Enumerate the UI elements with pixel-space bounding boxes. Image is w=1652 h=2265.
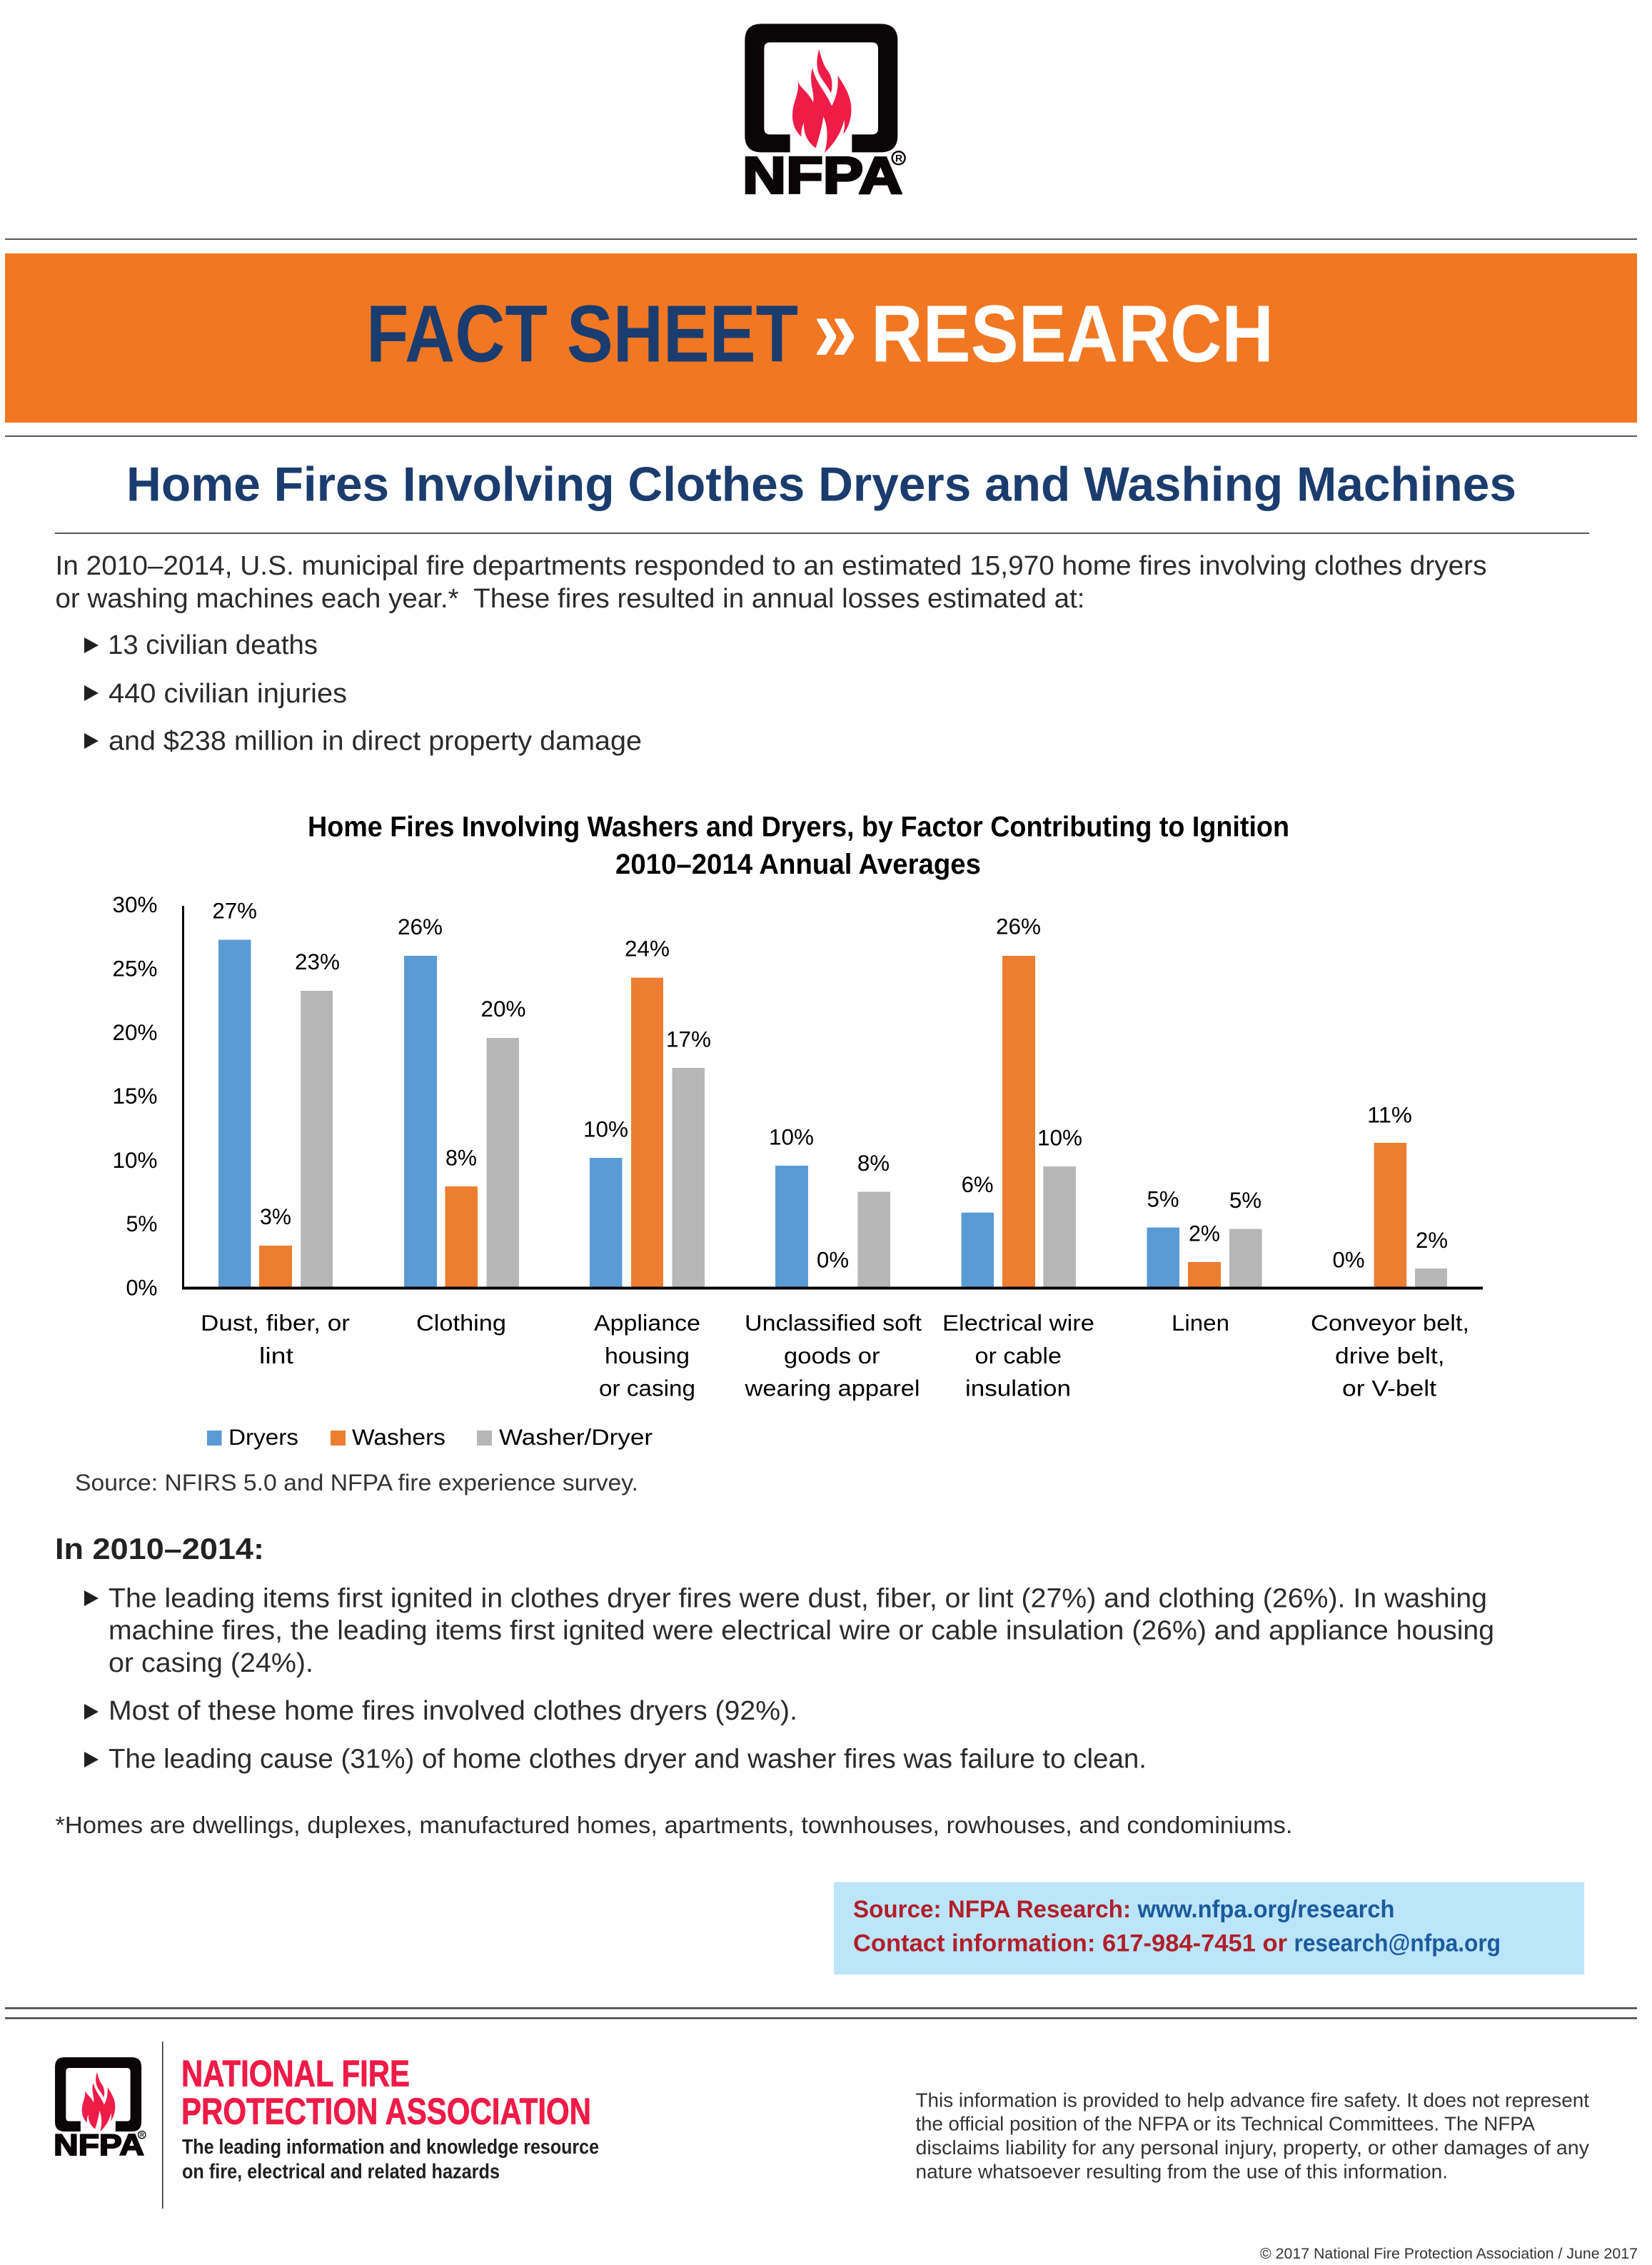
footer: organization name and tagline: on fire, electrical and related hazards: [182, 2160, 500, 2183]
intro paragraph: In 2010–2014, U.S. municipal fire departments responded to an estimated 15,970 home fires involving clothes dryers: [56, 551, 1486, 581]
category labels: or V-belt: [1342, 1375, 1436, 1401]
legend: Washer/Dryer: [499, 1424, 653, 1450]
logo: NFPA footer: R: [140, 2132, 144, 2139]
logo: NFPA top: R: [895, 153, 902, 164]
disclaimer: nature whatsoever resulting from the use of this information.: [915, 2160, 1448, 2183]
bullet list: findings: or casing (24%).: [109, 1648, 313, 1678]
data labels: 6%: [962, 1171, 994, 1197]
y axis labels: 30%: [113, 892, 157, 917]
title: Home Fires Involving Clothes Dryers and Washing Machines: [126, 457, 1516, 511]
category labels: or cable: [975, 1343, 1062, 1368]
axes: [182, 906, 1483, 1289]
logo: NFPA top: NFPA: [742, 147, 902, 205]
logo: NFPA top: [742, 24, 905, 205]
bars: washers: [259, 956, 1406, 1288]
chart title: [308, 811, 1289, 880]
category labels: Appliance: [594, 1310, 700, 1336]
data labels: 10%: [1037, 1125, 1082, 1151]
bullet list: findings: machine fires, the leading items first ignited were electrical wire or cable insulation (26%) and appliance housing: [109, 1616, 1494, 1646]
data labels: 24%: [625, 935, 670, 961]
data labels: 26%: [996, 914, 1041, 939]
banner: fact sheet research: FACT SHEET: [366, 288, 798, 378]
intro paragraph: [56, 551, 1486, 614]
disclaimer: disclaims liability for any personal injury, property, or other damages of any: [915, 2137, 1589, 2159]
bullet list: annual losses: and $238 million in direct property damage: [109, 727, 642, 757]
callout: source and contact: [834, 1882, 1584, 1974]
y axis labels: 20%: [113, 1019, 157, 1045]
callout: source and contact: Contact information: 617-984-7451 or: [853, 1930, 1287, 1957]
intro paragraph: or washing machines each year.* These fires resulted in annual losses estimated at:: [56, 584, 1085, 614]
callout: source and contact: research@nfpa.org: [1294, 1930, 1501, 1957]
chart source: Source: NFIRS 5.0 and NFPA fire experience survey.: [75, 1470, 638, 1495]
callout: source and contact: Source: NFPA Research:: [853, 1896, 1131, 1923]
category labels: Dust, fiber, or: [201, 1310, 350, 1336]
y axis labels: [113, 892, 157, 1301]
data labels: 23%: [295, 949, 340, 974]
y axis labels: 25%: [113, 955, 157, 981]
chart title: 2010–2014 Annual Averages: [615, 849, 981, 880]
data labels: 10%: [583, 1116, 628, 1142]
category labels: Conveyor belt,: [1311, 1310, 1469, 1336]
logo: NFPA footer: NFPA: [54, 2128, 144, 2161]
data labels: [212, 898, 1448, 1272]
y axis labels: 0%: [126, 1275, 157, 1301]
bullet list: annual losses: 13 civilian deaths: [108, 630, 318, 660]
banner: fact sheet research: [5, 253, 1637, 423]
callout: source and contact: www.nfpa.org/research: [1137, 1896, 1395, 1923]
category labels: Linen: [1172, 1310, 1229, 1336]
y axis labels: 10%: [113, 1147, 157, 1173]
y axis labels: 15%: [113, 1083, 157, 1109]
y axis labels: 5%: [126, 1211, 157, 1236]
data labels: 26%: [398, 914, 443, 939]
footer: organization name and tagline: NATIONAL FIRE: [181, 2053, 410, 2094]
data labels: 3%: [260, 1204, 291, 1229]
heading: in 2010-2014: In 2010–2014:: [55, 1532, 264, 1565]
data labels: 5%: [1229, 1187, 1261, 1213]
data labels: 20%: [481, 996, 525, 1021]
legend: Dryers: [228, 1424, 298, 1450]
banner: fact sheet research: RESEARCH: [871, 288, 1274, 378]
banner: fact sheet research: »: [813, 277, 857, 381]
data labels: 27%: [212, 898, 257, 924]
category labels: insulation: [965, 1375, 1071, 1401]
data labels: 8%: [445, 1145, 477, 1171]
category labels: lint: [259, 1343, 293, 1368]
data labels: 8%: [857, 1150, 890, 1176]
bullet list: findings: The leading cause (31%) of home clothes dryer and washer fires was failure to clean.: [109, 1745, 1147, 1775]
bullet list: findings: [84, 1583, 1494, 1775]
bar chart: [113, 892, 1483, 1450]
bullet list: findings: Most of these home fires involved clothes dryers (92%).: [109, 1696, 797, 1726]
data labels: 17%: [666, 1026, 711, 1052]
disclaimer: [915, 2089, 1589, 2183]
data labels: 11%: [1367, 1102, 1412, 1128]
data labels: 0%: [817, 1246, 849, 1272]
copyright: © 2017 National Fire Protection Association / June 2017: [1260, 2245, 1638, 2262]
category labels: drive belt,: [1335, 1343, 1445, 1368]
bars: washer/dryer: [301, 991, 1447, 1288]
footnote: *Homes are dwellings, duplexes, manufactured homes, apartments, townhouses, rowhouses, and condominiums.: [56, 1812, 1292, 1838]
data labels: 2%: [1416, 1227, 1448, 1253]
bullet list: findings: The leading items first ignited in clothes dryer fires were dust, fiber, or lint (27%) and clothing (26%). In washing: [109, 1583, 1487, 1613]
footer: organization name and tagline: [181, 2053, 599, 2183]
category labels: or casing: [599, 1375, 695, 1401]
bullet list: annual losses: [84, 630, 642, 757]
category labels: housing: [605, 1343, 690, 1368]
category labels: Clothing: [416, 1310, 506, 1336]
data labels: 10%: [769, 1124, 814, 1149]
bars: dryers: [218, 939, 1179, 1288]
bullet list: annual losses: 440 civilian injuries: [109, 679, 347, 709]
data labels: 2%: [1189, 1221, 1220, 1246]
category labels: Unclassified soft: [745, 1310, 922, 1336]
legend: Washers: [352, 1424, 445, 1450]
disclaimer: This information is provided to help advance fire safety. It does not represent: [915, 2089, 1589, 2112]
category labels: Electrical wire: [942, 1310, 1094, 1336]
category labels: [201, 1310, 1469, 1401]
data labels: 0%: [1332, 1246, 1365, 1272]
category labels: wearing apparel: [744, 1375, 920, 1401]
footer: organization name and tagline: The leading information and knowledge resource: [182, 2136, 599, 2159]
logo: NFPA footer: [54, 2057, 146, 2161]
legend: [207, 1424, 653, 1450]
disclaimer: the official position of the NFPA or its Technical Committees. The NFPA: [915, 2113, 1536, 2134]
category labels: goods or: [784, 1343, 880, 1368]
chart title: Home Fires Involving Washers and Dryers, by Factor Contributing to Ignition: [308, 811, 1289, 842]
data labels: 5%: [1147, 1186, 1179, 1212]
footer: organization name and tagline: PROTECTION ASSOCIATION: [181, 2090, 591, 2132]
